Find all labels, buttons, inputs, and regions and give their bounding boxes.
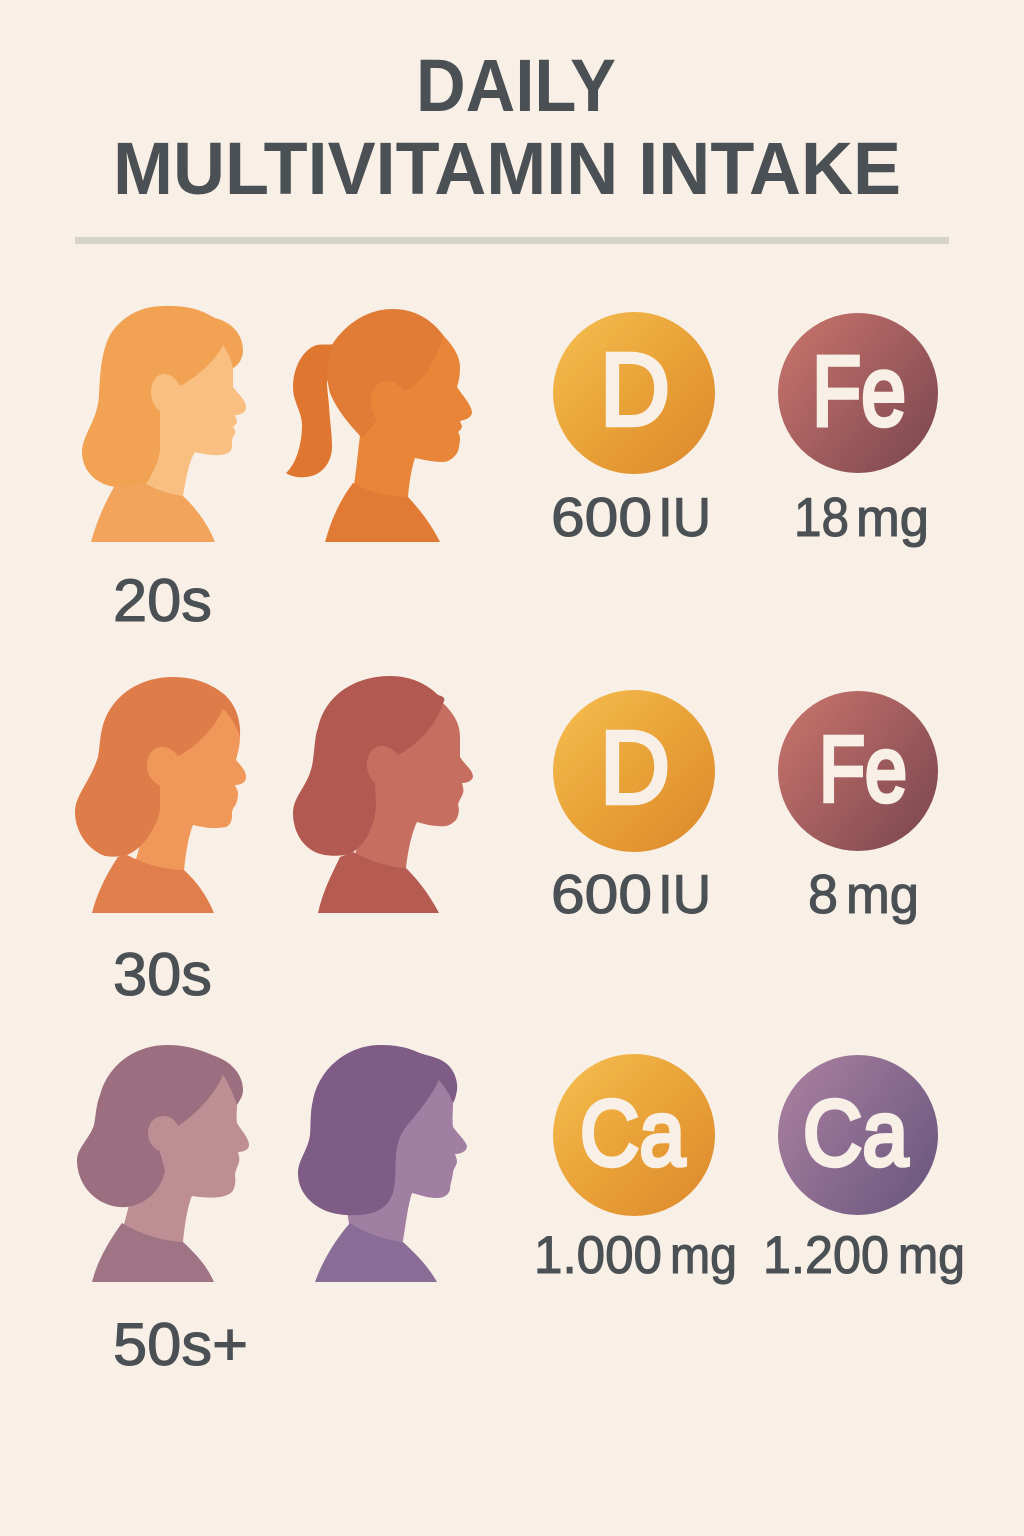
icon: 50s+ woman with purple bob [298,1045,467,1282]
value: 600 IU: IU [658,486,711,548]
panel: 50s+ row [77,1045,965,1378]
value: 8 mg: 8 [808,863,838,925]
value: 600 IU: 600 [551,486,652,548]
icon: vitamin D badge [553,312,715,474]
icon: vitamin D badge: D [600,710,670,825]
value: 8 mg: mg [846,866,919,925]
panel: 30s row [75,676,938,1008]
value: 1.200 mg: mg [898,1227,965,1285]
value: 18 mg [794,486,929,548]
icon: 20s woman with ponytail [286,309,472,542]
value: 1.200 mg [763,1226,965,1285]
value: 1.000 mg [534,1226,737,1285]
value: 1.200 mg: 1.200 [763,1226,889,1285]
value: 600 IU [551,863,711,925]
value: 18 mg: mg [856,489,929,548]
value: 600 IU: IU [658,863,711,925]
icon: iron badge [778,691,938,851]
value: 8 mg [808,863,919,925]
icon: iron badge [778,313,938,473]
icon: 20s woman with shoulder-length hair [82,306,246,542]
value: 600 IU [551,486,711,548]
icon: 30s woman with rounded bob [75,677,246,913]
icon: vitamin D badge [553,690,715,852]
value: 1.000 mg: 1.000 [534,1226,662,1285]
icon: vitamin D badge: D [600,332,670,447]
icon: iron badge: Fe [819,717,907,821]
label: 50s+: 50s+ [113,1311,248,1378]
value: 1.000 mg: mg [670,1227,737,1285]
panel: 20s row [82,306,938,634]
label: 20s: 20s [113,567,212,634]
icon: calcium badge orange: Ca [580,1081,685,1185]
value: 600 IU: 600 [551,863,652,925]
title: MULTIVITAMIN INTAKE [113,127,901,210]
icon: iron badge: Fe [812,335,906,446]
icon: calcium badge purple [778,1055,938,1215]
title: DAILY [416,44,616,127]
icon: calcium badge purple: Ca [803,1081,908,1185]
icon: 50s+ woman with mauve bob [77,1045,249,1282]
label: 30s: 30s [113,941,212,1008]
value: 18 mg: 18 [794,486,849,548]
icon: calcium badge orange [553,1054,715,1216]
title [113,44,901,210]
icon: 30s woman with dark rose bob [293,676,473,913]
